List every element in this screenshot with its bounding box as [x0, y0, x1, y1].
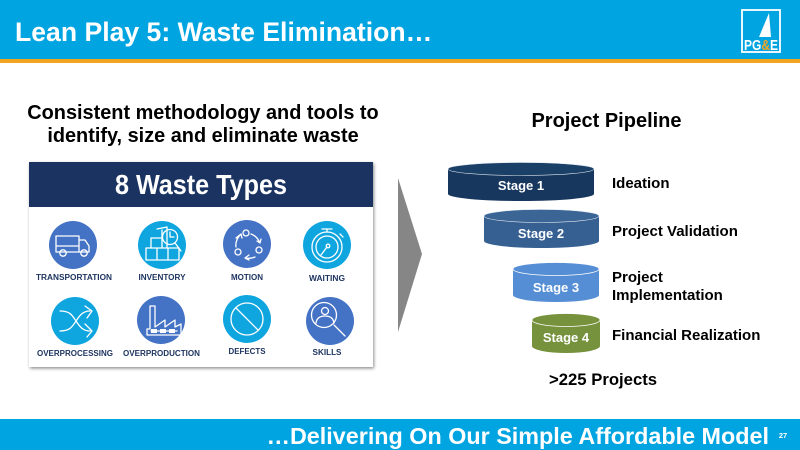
label: project implementation: Project [612, 269, 663, 286]
title: Lean Play 5: Waste Elimination… [15, 17, 432, 47]
subtitle text: identify, size and eliminate waste [47, 125, 359, 147]
icon: waiting [303, 221, 351, 269]
icon: defects [223, 295, 271, 343]
label: defects: DEFECTS [228, 346, 266, 356]
footer band [0, 419, 800, 450]
icon: PG&E logo [742, 10, 780, 54]
project count: >225 Projects [549, 370, 657, 389]
label: financial realization: Financial Realization [612, 327, 760, 344]
icon: overproduction [137, 296, 185, 344]
cylinder: stage 3 [513, 262, 599, 302]
icon: PG&E logo: PG&E [744, 38, 778, 54]
label: transportation: TRANSPORTATION [36, 272, 112, 282]
footer text: …Delivering On Our Simple Affordable Model [267, 423, 769, 449]
icon: transportation [49, 221, 97, 269]
cylinder: stage 4: Stage 4 [543, 330, 590, 345]
icon: inventory [138, 221, 186, 269]
cylinder: stage 2 [484, 210, 599, 248]
label: skills: SKILLS [312, 347, 342, 357]
label: ideation: Ideation [612, 175, 670, 192]
label: inventory: INVENTORY [138, 272, 186, 282]
cylinder: stage 1 [448, 162, 594, 201]
panel: 8 waste types [29, 162, 373, 367]
label: project implementation: Implementation [612, 287, 723, 304]
label: waiting: WAITING [309, 273, 345, 283]
arrow [398, 178, 422, 332]
page number: 27 [779, 431, 787, 440]
icon: motion [223, 220, 271, 268]
label: overproduction: OVERPRODUCTION [123, 348, 200, 358]
panel heading: 8 Waste Types [115, 169, 287, 200]
cylinder: stage 4 [532, 314, 600, 353]
label: overprocessing: OVERPROCESSING [37, 348, 113, 358]
heading: project pipeline: Project Pipeline [531, 110, 682, 132]
header band [0, 0, 800, 63]
cylinder: stage 1: Stage 1 [498, 178, 544, 193]
subtitle text: Consistent methodology and tools to [27, 102, 379, 124]
icon: overprocessing [51, 297, 99, 345]
cylinder: stage 2: Stage 2 [518, 226, 564, 241]
icon: skills [306, 297, 354, 345]
cylinder: stage 3: Stage 3 [533, 280, 579, 295]
label: project validation: Project Validation [612, 223, 738, 240]
label: motion: MOTION [231, 272, 263, 282]
panel heading [29, 162, 373, 207]
